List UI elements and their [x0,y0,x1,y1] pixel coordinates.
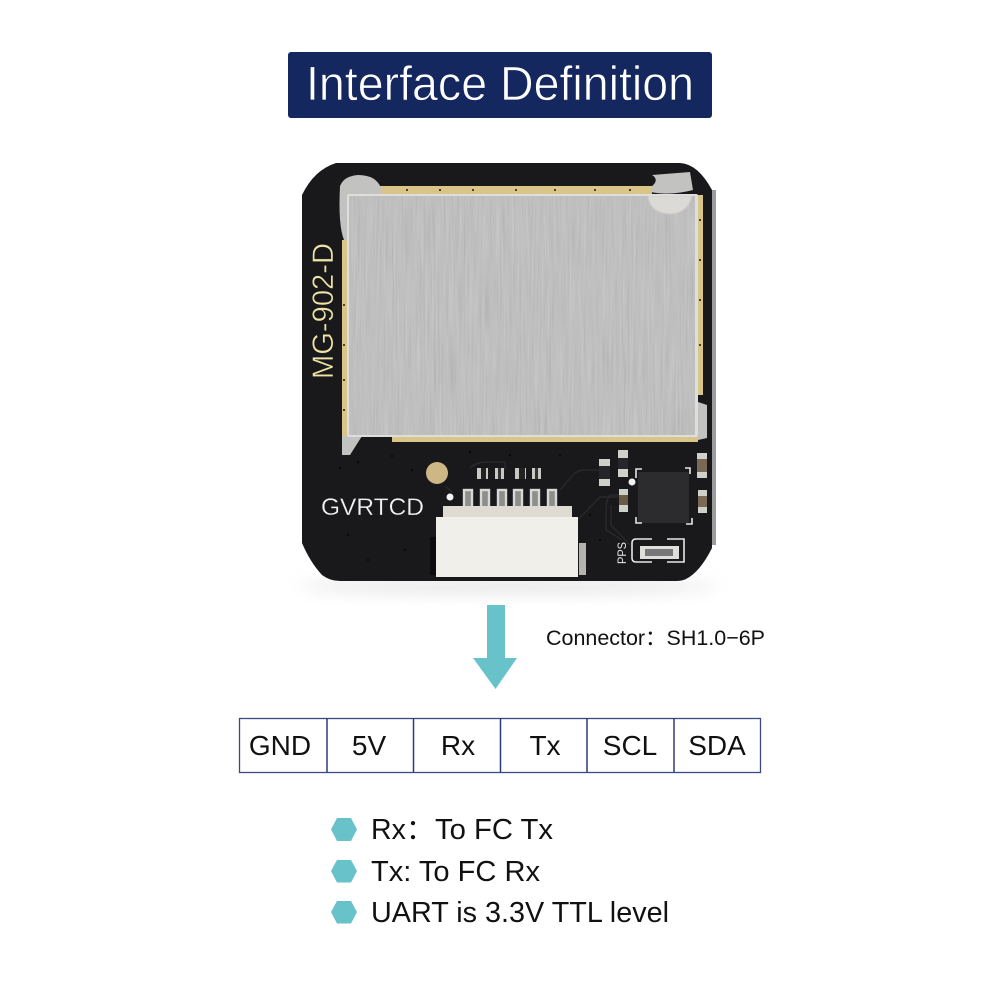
silkscreen: PPS: PPS [615,542,629,564]
title banner: Interface Definition [306,58,694,111]
pinout table: GND [249,730,311,761]
gold shield frame [342,186,703,442]
pinout table: SCL [603,730,657,761]
gold test pad [426,462,448,484]
silkscreen: brand: GVRTCD [321,494,424,521]
board traces [445,462,630,545]
pinout table [240,718,760,772]
shield frame vias [343,189,701,411]
silkscreen: model name: MG-902-D [307,243,340,379]
small capacitors [599,450,707,513]
bullet 2: Tx: To FC Rx [371,856,540,888]
arrow pointing down [473,605,517,689]
bullet 3: UART is 3.3V TTL level [371,897,669,929]
white SH1.0 connector [430,506,586,577]
circuit board outline [302,163,712,581]
connector pins [464,490,556,516]
solder blobs [340,172,707,455]
pinout table: SDA [688,730,746,761]
pinout table: 5V [352,730,386,761]
photo: GPS module board [299,163,719,594]
black sensor chip [636,468,692,524]
bullet list [331,814,669,929]
pinout table: Rx [441,730,475,761]
bullet 1: To FC Tx [435,814,553,846]
board vias [339,451,601,561]
right board edge highlight [711,190,716,545]
bullet 1: Rx： [371,814,434,846]
metal shield can [347,194,698,437]
PPS LED [632,539,684,562]
bullet 1 [331,814,553,846]
pinout table: Tx [529,730,561,761]
connector label: Connector：SH1.0−6P [546,626,765,650]
small top resistors [477,468,541,479]
